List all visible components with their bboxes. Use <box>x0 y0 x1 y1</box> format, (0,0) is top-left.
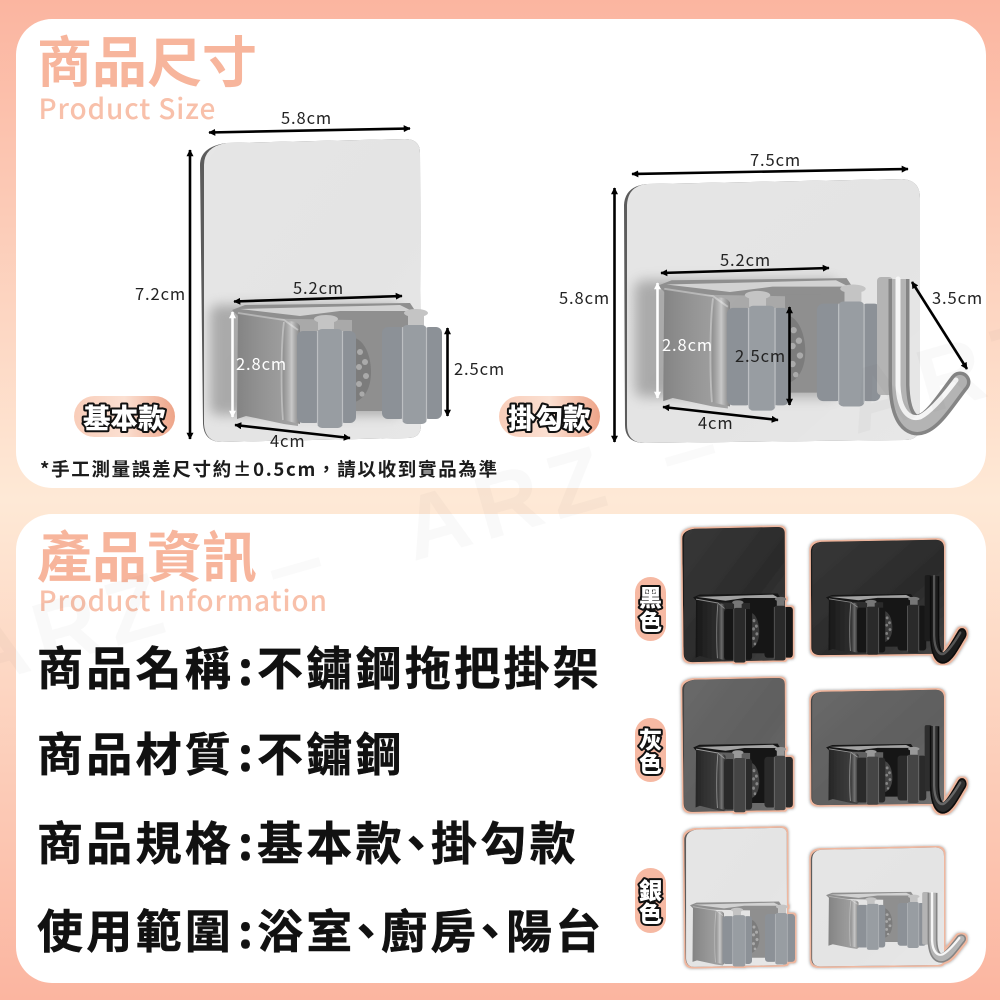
watermark <box>0 298 1000 707</box>
dimensions: mount with hook: 7.5cm <box>750 147 801 171</box>
spec: 使用範圍: 、 <box>343 896 392 962</box>
panel: product size <box>16 18 986 488</box>
spec: 使用範圍: 使用範圍 <box>37 896 234 962</box>
swatch: black basic <box>682 527 793 663</box>
title: 商品尺寸: 商品尺寸 <box>37 18 257 98</box>
badge: 灰色: 灰 <box>639 721 662 755</box>
dimensions: basic mount <box>135 105 505 452</box>
spec: 商品規格: 商品規格 <box>37 808 234 874</box>
watermark: ARZ <box>391 425 626 580</box>
spec: 商品規格: 基本款 <box>257 808 405 874</box>
spec: 商品材質: 商品材質 <box>37 719 234 785</box>
dimensions: basic mount: 7.2cm <box>135 281 186 305</box>
badge: 黑色: 色 <box>639 603 662 637</box>
swatch: silver hook <box>811 848 966 966</box>
title: 產品資訊: 產品資訊 <box>37 513 257 593</box>
dimensions: basic mount: 2.5cm <box>454 356 505 380</box>
spec: 商品名稱: 不鏽鋼拖把掛架 <box>257 633 602 699</box>
spec: 使用範圍: 陽台 <box>506 896 605 962</box>
badge: 銀色: 色 <box>639 895 662 929</box>
dimensions: basic mount: 5.2cm <box>293 275 344 299</box>
dimensions: mount with hook: 2.5cm <box>735 343 786 367</box>
dimensions: basic mount: 2.8cm <box>236 351 287 375</box>
spec: 商品規格: : <box>238 808 256 874</box>
spec: 商品材質: : <box>238 719 256 785</box>
badge: 基本款: 基本款 <box>83 396 166 436</box>
spec: 使用範圍: 浴室 <box>257 896 356 962</box>
spec: 商品名稱: 商品名稱 <box>37 633 234 699</box>
subtitle: Product Information: Product Information <box>38 580 328 620</box>
badge: 灰色 <box>635 718 666 782</box>
subtitle: Product Size: Product Size <box>38 88 216 128</box>
spec: 使用範圍: 廚房 <box>381 896 480 962</box>
spec: 商品材質: 不鏽鋼 <box>257 719 405 785</box>
swatch: black hook <box>811 540 967 658</box>
badge: 灰色: 色 <box>639 745 662 779</box>
dimensions: mount with hook: 5.8cm <box>559 285 610 309</box>
swatch: gray hook <box>811 690 967 808</box>
swatch: gray basic <box>682 678 793 812</box>
panel: product information <box>16 513 986 983</box>
spec: 商品規格: 掛勾款 <box>431 808 579 874</box>
badge: 銀色 <box>635 868 666 933</box>
swatch: silver basic <box>684 828 795 967</box>
dimensions: mount with hook <box>559 147 983 442</box>
dimensions: mount with hook: 4cm <box>698 410 734 434</box>
footnote: *手工測量誤差尺寸約±0.5cm，請以收到實品為準 <box>40 456 499 482</box>
spec: 商品規格: 、 <box>393 808 442 874</box>
badge: 銀色: 銀 <box>639 872 662 906</box>
dimensions: basic mount: 4cm <box>270 428 306 452</box>
dimensions: mount with hook: 2.8cm <box>662 332 713 356</box>
product: mount with hook <box>624 179 970 443</box>
badge: 黑色 <box>635 577 666 641</box>
product: basic mount <box>200 139 442 442</box>
spec: 使用範圍: 、 <box>467 896 516 962</box>
spec: 商品名稱: : <box>238 633 256 699</box>
badge: 黑色: 黑 <box>639 579 662 613</box>
dimensions: basic mount: 5.8cm <box>281 105 332 129</box>
dimensions: mount with hook: 3.5cm <box>932 285 983 309</box>
spec: 使用範圍: : <box>238 896 256 962</box>
dimensions: mount with hook: 5.2cm <box>720 247 771 271</box>
badge: 掛勾款: 掛勾款 <box>508 396 591 436</box>
